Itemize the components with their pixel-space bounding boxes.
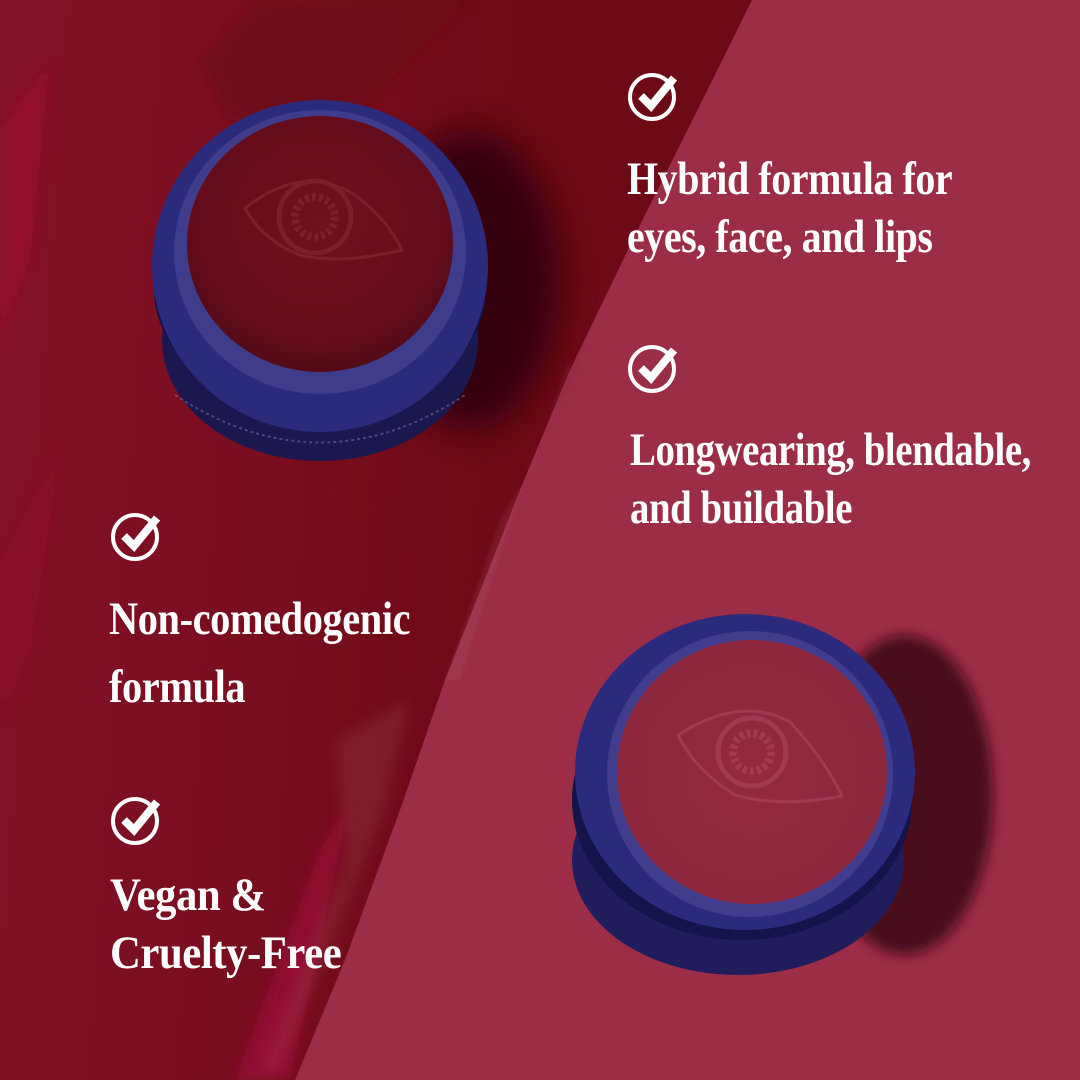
text: vegan: Cruelty-Free bbox=[110, 927, 341, 979]
text: vegan bbox=[110, 869, 341, 979]
dark red swatch bbox=[0, 0, 752, 1080]
feature: hybrid formula bbox=[627, 73, 952, 263]
text: longwearing: Longwearing, blendable, bbox=[630, 424, 1031, 476]
text: non-comedogenic: Non-comedogenic bbox=[109, 593, 410, 645]
jar 1 bbox=[152, 100, 488, 461]
text: vegan: Vegan & bbox=[110, 869, 266, 921]
text: non-comedogenic: formula bbox=[109, 661, 245, 713]
feature: longwearing bbox=[628, 345, 1031, 534]
text: longwearing: and buildable bbox=[630, 482, 852, 534]
text: non-comedogenic bbox=[109, 593, 410, 713]
crimson left streak bbox=[0, 60, 50, 340]
glossy edge streak bbox=[262, 700, 410, 1075]
feature: non-comedogenic bbox=[109, 513, 410, 713]
icon: check badge bbox=[111, 513, 160, 561]
text: hybrid formula: eyes, face, and lips bbox=[627, 211, 933, 263]
text: hybrid formula: Hybrid formula for bbox=[627, 153, 952, 205]
icon: check badge bbox=[628, 345, 677, 393]
jar 2 bbox=[572, 614, 915, 975]
feature: vegan bbox=[110, 797, 341, 979]
text: hybrid formula bbox=[627, 153, 952, 263]
icon: check badge bbox=[111, 797, 160, 845]
jar 1 shadow bbox=[380, 130, 560, 430]
jar 2 shadow bbox=[817, 635, 993, 955]
icon: check badge bbox=[628, 73, 677, 121]
text: longwearing bbox=[630, 424, 1031, 534]
